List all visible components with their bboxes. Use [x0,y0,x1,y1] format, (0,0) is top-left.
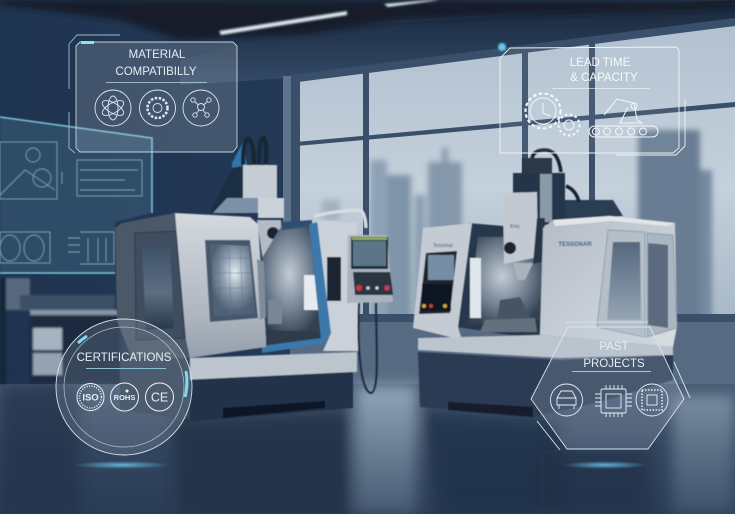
dark side [115,213,190,360]
doors [597,230,645,337]
glass window [205,240,258,322]
icon: car [550,384,582,416]
icon: circuit board [636,384,668,416]
control panel [347,235,393,303]
icon: RoHS: ROHS [114,393,135,402]
front panel [175,213,266,358]
heading: CERTIFICATIONS [77,352,172,364]
lower wall [290,322,735,384]
panel: lead time and capacity [498,43,685,155]
right body [317,220,358,351]
icon: network nodes [183,90,219,126]
blue door frame [262,222,331,353]
control cable [358,303,377,393]
cavity [457,223,545,340]
panel: past projects [531,322,690,450]
CNC machine: right: Tessonar [433,243,453,249]
warning plate [327,257,341,301]
window frames [290,18,735,324]
icon: CE: CE [151,390,168,404]
main body [540,216,677,347]
panel: certifications [56,319,192,455]
panel: lead time and capacity: & CAPACITY [570,72,638,84]
CNC machine: right [413,150,677,417]
machining cavity [262,225,323,334]
icon: ISO: ISO [82,392,99,404]
icon: clock gears [526,94,580,136]
left body [413,223,472,340]
panel: material compatibility [69,35,237,153]
heading: PAST [599,341,629,353]
workbench on left [0,278,120,384]
ceiling lights [219,0,440,35]
heading: LEAD TIME [570,57,631,69]
lit column by window [283,76,291,326]
ceiling soffit [180,0,735,85]
window with skyline [290,18,735,330]
CNC machine: right: Kmc [510,224,520,230]
column and cables [545,200,623,222]
CNC machine: right: TESSONAR [558,242,592,248]
heading: MATERIAL [129,49,186,61]
wall schematic display [0,117,152,273]
icon: atom [95,90,131,126]
floor reflections [0,384,735,514]
icon: gear [140,90,176,126]
column and cables [210,167,245,215]
floor glows [74,461,170,469]
icon: microchip [595,385,632,417]
control panel [419,251,457,314]
panel: past projects: PROJECTS [583,358,645,370]
base [418,335,673,358]
spindle head [503,192,538,264]
icon: robot arm on conveyor [589,99,658,137]
base [190,352,357,380]
floor [0,384,735,514]
fixture [497,297,530,322]
CNC machine: left [115,138,393,422]
panel: material compatibility: COMPATIBILLY [115,66,197,78]
